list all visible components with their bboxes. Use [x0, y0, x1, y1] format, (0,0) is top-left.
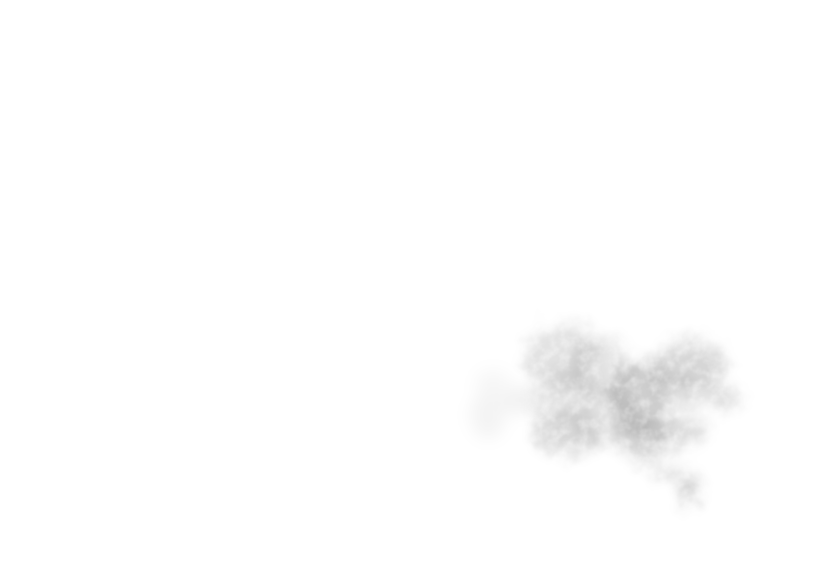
faint left wisp	[470, 370, 542, 439]
smoke cloud	[470, 322, 740, 506]
main smoke mass	[526, 322, 740, 506]
